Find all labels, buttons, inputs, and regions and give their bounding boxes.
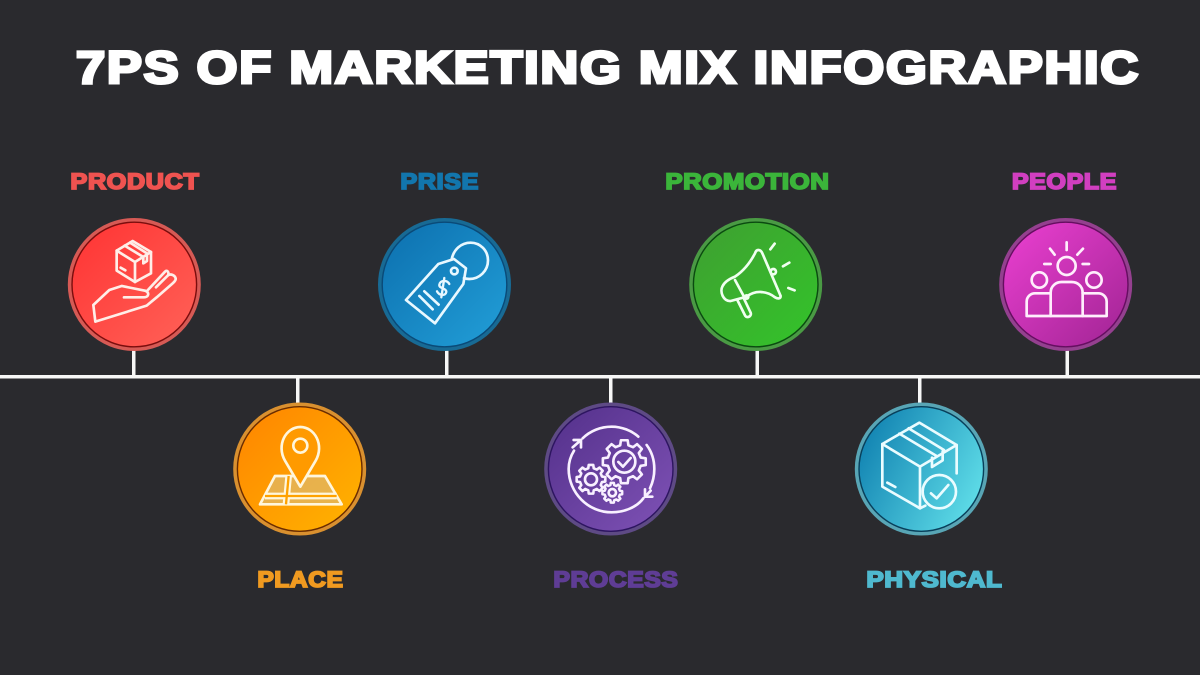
- icon: map pin: [260, 427, 342, 504]
- gear medium: [577, 465, 605, 494]
- gear large: [603, 440, 646, 483]
- badge: promotion circle: [691, 220, 821, 350]
- badge: process circle: [546, 404, 676, 534]
- label: product: PRODUCT: [70, 169, 200, 194]
- icon: group of people: [1027, 242, 1107, 316]
- label: people: PEOPLE: [1012, 169, 1117, 194]
- badge: physical circle: [856, 404, 986, 534]
- label: place: PLACE: [258, 567, 344, 592]
- icon: gears: [569, 427, 654, 512]
- item: product: [69, 169, 200, 350]
- badge: prise circle: [380, 220, 510, 350]
- item: physical: [856, 404, 1002, 592]
- label: promotion: PROMOTION: [666, 169, 830, 194]
- label: prise: PRISE: [400, 169, 479, 194]
- item: place: [235, 404, 365, 592]
- item: promotion: [666, 169, 830, 350]
- item: people: [1001, 169, 1131, 350]
- badge: product circle: [69, 220, 199, 350]
- icon: box on hand: [93, 241, 176, 322]
- badge: people circle: [1001, 220, 1131, 350]
- badge: place circle: [235, 404, 365, 534]
- label: process: PROCESS: [554, 567, 678, 592]
- icon: megaphone: [721, 244, 795, 317]
- item: prise: [380, 169, 510, 350]
- timeline: [0, 350, 1200, 405]
- title: 7PS OF MARKETING MIX INFOGRAPHIC: [76, 42, 1140, 93]
- item: process: [546, 404, 678, 592]
- label: physical: PHYSICAL: [866, 567, 1002, 592]
- icon: checked package: [882, 423, 957, 508]
- icon: price tag: [406, 243, 488, 323]
- gear small: [602, 483, 622, 503]
